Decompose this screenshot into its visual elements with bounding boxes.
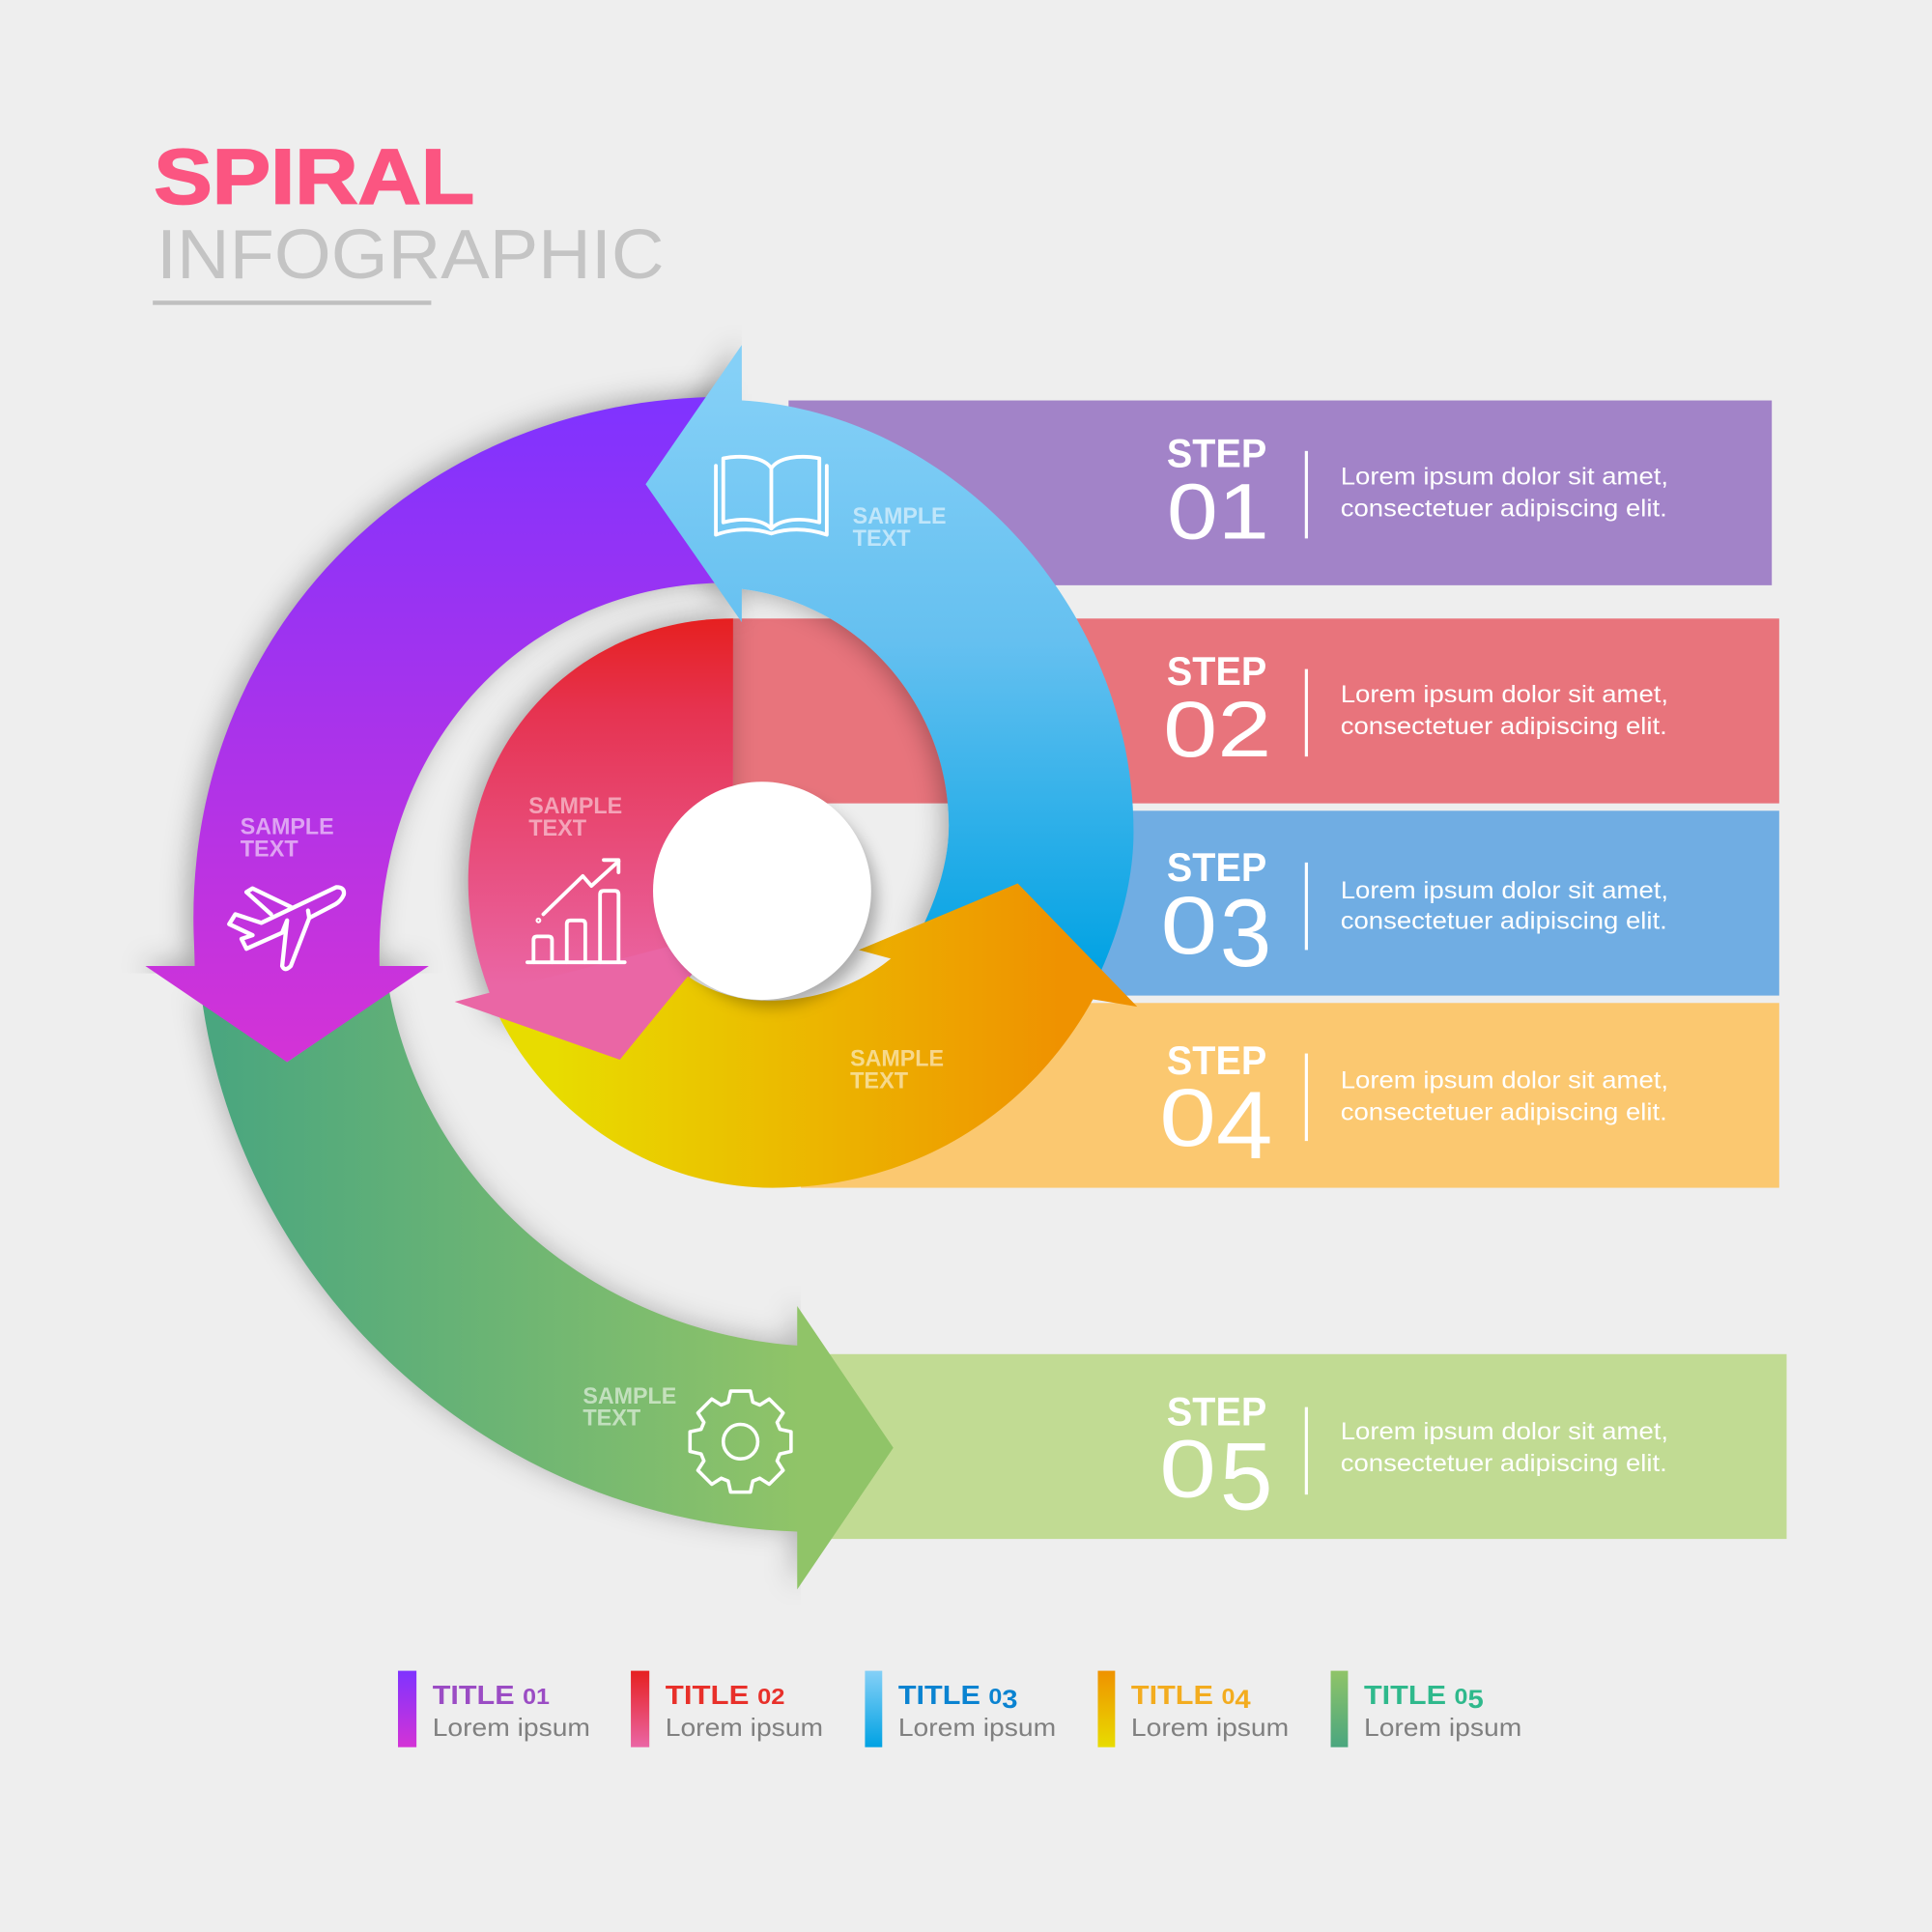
legend item 01: TITLE 01 [433,1680,550,1710]
legend item 03 [865,1671,1056,1747]
label: purple sample text: TEXT [241,836,298,862]
blue arrow [645,345,1133,1005]
step 05 bar: STEP [1167,1389,1266,1435]
label: orange sample text: TEXT [850,1067,908,1094]
step 02 bar: consectetuer adipiscing elit. [1341,713,1667,740]
legend item 05: TITLE 0 [1364,1680,1466,1710]
blue arrow shadow [684,346,949,930]
icon: growth chart [527,860,625,962]
step 04 bar: STEP [1167,1037,1266,1083]
step 04 bar: Lorem ipsum dolor sit amet, [1341,1066,1668,1094]
legend item 02: Lorem ipsum [666,1715,823,1742]
label: green sample text: SAMPLE [582,1383,676,1409]
step 03 bar: 0 [1161,880,1217,971]
legend item 02: TITLE 02 [666,1680,784,1710]
legend item 03: TITLE 0 [898,1680,1001,1710]
step 05 bar [813,1354,1786,1539]
step 02 bar: Lorem ipsum dolor sit amet, [1341,681,1668,708]
step 01 bar: STEP [1167,430,1266,475]
step 02 bar: 02 [1163,686,1271,774]
pink arrowhead [455,943,702,1060]
step 05 bar: 0 [1159,1424,1216,1515]
step 01 bar [788,401,1772,585]
legend item 04: 4 [1235,1685,1251,1714]
icon: airplane [229,887,344,969]
step 04 bar: 4 [1216,1072,1273,1179]
label: purple sample text: SAMPLE [241,814,334,840]
label: orange sample text: SAMPLE [850,1045,944,1071]
step 03 bar: Lorem ipsum dolor sit amet, [1341,877,1668,904]
step 05 bar: 5 [1220,1423,1273,1530]
step 03 bar [998,810,1779,996]
step 01 bar: consectetuer adipiscing elit. [1341,495,1667,522]
orange arrow [499,884,1137,1188]
title [153,133,664,305]
step 02 bar [733,618,1779,804]
white centre circle [653,781,877,1007]
title: INFOGRAPHIC [156,215,664,294]
legend item 05: 5 [1467,1685,1484,1714]
step 04 bar [801,1003,1779,1188]
legend item 05 [1331,1671,1521,1747]
legend item 01: Lorem ipsum [433,1715,590,1742]
step 03 bar: STEP [1167,844,1266,890]
step 05 bar: Lorem ipsum dolor sit amet, [1341,1418,1668,1445]
legend item 04: Lorem ipsum [1131,1715,1289,1742]
step 03 bar: consectetuer adipiscing elit. [1341,908,1667,935]
legend item 02 [631,1671,823,1747]
label: red sample text: TEXT [528,815,586,841]
legend item 03: Lorem ipsum [898,1715,1056,1742]
legend item 01 [398,1671,590,1747]
green arrow [197,989,894,1589]
step 03 bar: 3 [1220,880,1271,987]
label: red sample text: SAMPLE [528,793,622,819]
label: blue sample text: TEXT [853,526,911,552]
purple arrow [140,394,727,1062]
step 01 bar: Lorem ipsum dolor sit amet, [1341,463,1668,490]
step 01 bar: 01 [1167,468,1269,555]
title: SPIRAL [154,133,474,220]
legend item 04 [1097,1671,1289,1747]
red ring segment [464,617,733,1060]
icon: book [716,457,827,535]
label: green sample text: TEXT [582,1406,640,1432]
step 05 bar: consectetuer adipiscing elit. [1341,1450,1667,1477]
legend item 04: TITLE 0 [1131,1680,1234,1710]
step 04 bar: 0 [1159,1072,1216,1163]
icon: gear [690,1391,791,1492]
step 02 bar: STEP [1167,648,1266,694]
label: blue sample text: SAMPLE [853,503,947,529]
step 04 bar: consectetuer adipiscing elit. [1341,1098,1667,1125]
legend item 03: 3 [1002,1685,1018,1714]
legend item 05: Lorem ipsum [1364,1715,1521,1742]
